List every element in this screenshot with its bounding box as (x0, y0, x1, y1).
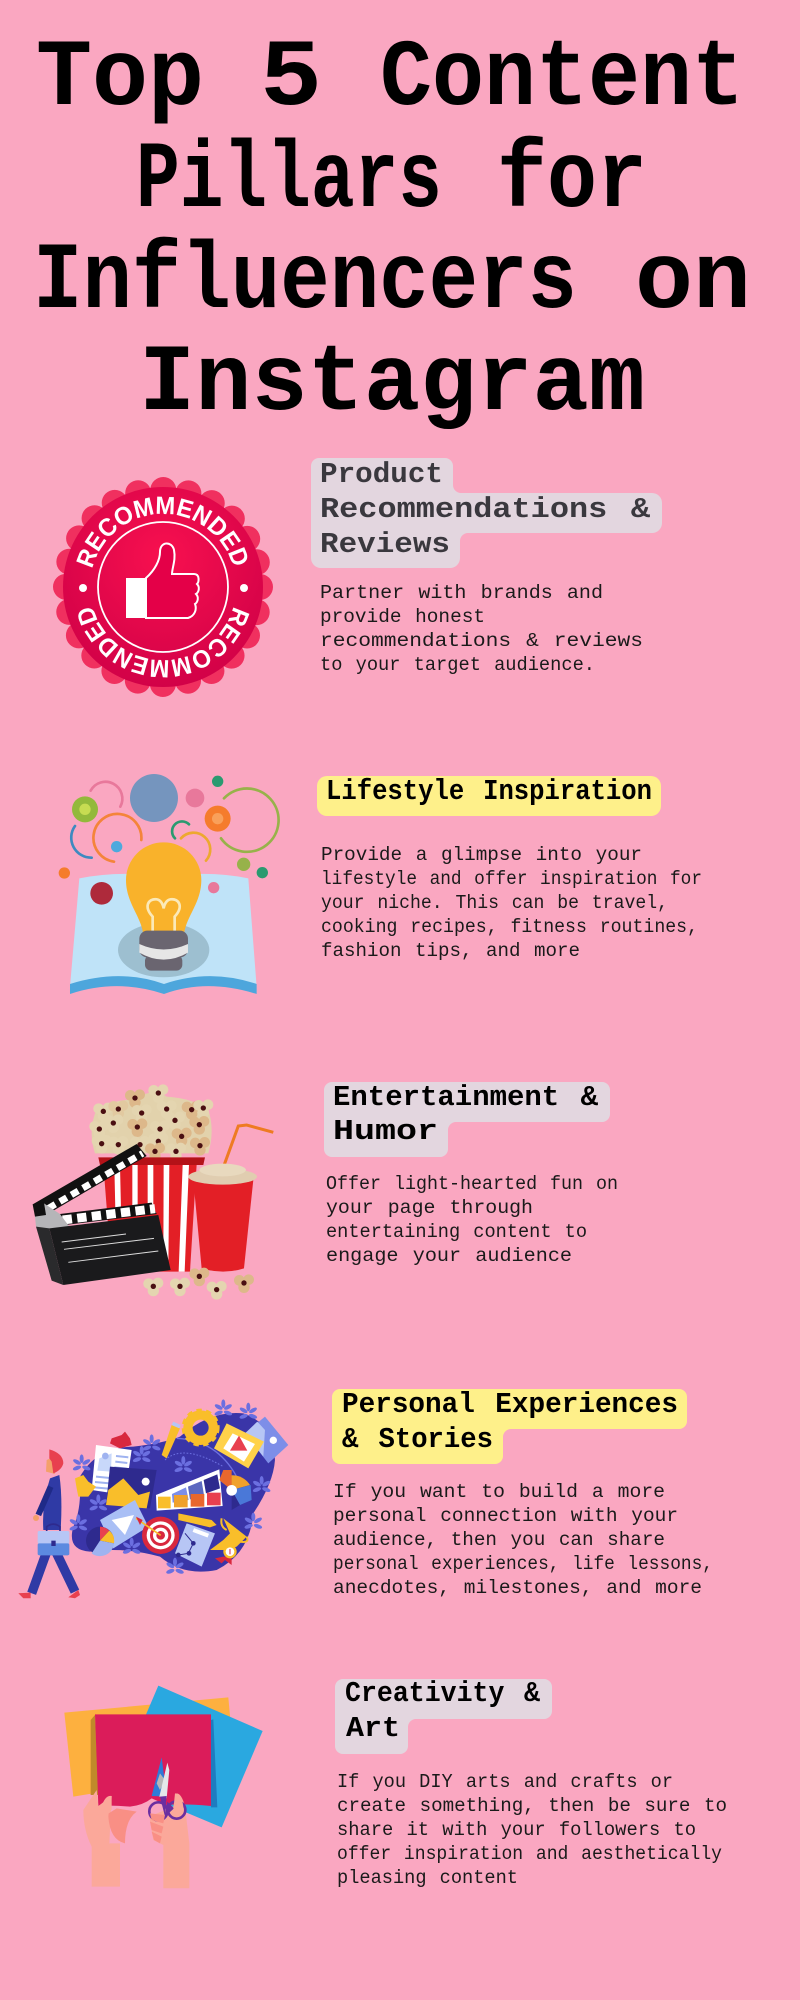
heading: product recommendations: Reviews (320, 528, 450, 561)
heading: personal experiences and stories: & Stories (342, 1423, 493, 1456)
text: creativity body: pleasing content (337, 1867, 518, 1889)
text: entertainment body: entertaining content to (326, 1221, 587, 1243)
heading: entertainment and humor: Entertainment & (333, 1081, 599, 1114)
text: entertainment body: engage your audience (326, 1245, 572, 1267)
icon: recommended badge (53, 477, 273, 697)
text: personal experiences body: audience, then you can share (333, 1529, 665, 1551)
text: lifestyle inspiration body: lifestyle and offer inspiration for (321, 868, 702, 890)
text: personal experiences body (333, 1481, 713, 1599)
title: Top (36, 25, 204, 133)
icon: light bulb and book (59, 774, 279, 994)
text: creativity body: offer inspiration and aesthetically (337, 1843, 722, 1865)
title (33, 25, 751, 438)
icon: recommended badge: RECOMMENDED (76, 496, 248, 568)
text: lifestyle inspiration body (321, 844, 702, 962)
title: Influencers (33, 228, 577, 336)
icon: popcorn, clapperboard and drink (33, 1084, 273, 1300)
icon: recommended badge: RECOMMENDED (78, 608, 250, 678)
icon: person walking with creative objects (18, 1399, 288, 1598)
text: lifestyle inspiration body: fashion tips, and more (321, 940, 580, 962)
text: lifestyle inspiration body: Provide a glimpse into your (321, 844, 642, 866)
text: entertainment body: your page through (326, 1197, 533, 1219)
text: entertainment body (326, 1173, 618, 1267)
text: product recommendations body: recommendations & reviews (320, 630, 643, 652)
text: lifestyle inspiration body: your niche. This can be travel, (321, 892, 668, 914)
text: personal experiences body: personal connection with your (333, 1505, 678, 1527)
text: personal experiences body: personal experiences, life lessons, (333, 1553, 713, 1575)
title: Instagram (139, 330, 645, 438)
text: personal experiences body: anecdotes, milestones, and more (333, 1577, 702, 1599)
heading: product recommendations (311, 458, 662, 568)
text: creativity body: If you DIY arts and crafts or (337, 1771, 673, 1793)
text: product recommendations body: Partner with brands and (320, 582, 603, 604)
text: entertainment body: Offer light-hearted fun on (326, 1173, 618, 1195)
heading: lifestyle inspiration: Lifestyle Inspiration (326, 775, 652, 808)
text: lifestyle inspiration body: cooking recipes, fitness routines, (321, 916, 698, 938)
heading: creativity and art: Art (346, 1712, 400, 1745)
title: on (635, 228, 751, 336)
text: creativity body: share it with your followers to (337, 1819, 696, 1841)
title: Pillars (136, 127, 442, 235)
text: creativity body (337, 1771, 727, 1889)
text: personal experiences body: If you want to build a more (333, 1481, 665, 1503)
heading: product recommendations: Recommendations & (320, 493, 651, 526)
title: 5 (260, 25, 322, 133)
title: for (497, 127, 647, 235)
heading: entertainment and humor: Humor (333, 1115, 438, 1148)
heading: personal experiences and stories (332, 1388, 687, 1464)
icon: hands cutting paper (64, 1686, 263, 1888)
heading: creativity and art: Creativity & (345, 1677, 541, 1710)
heading: creativity and art (335, 1677, 552, 1754)
heading: entertainment and humor (324, 1081, 610, 1157)
text: product recommendations body: to your target audience. (320, 654, 595, 676)
text: creativity body: create something, then be sure to (337, 1795, 727, 1817)
title: Content (380, 25, 744, 133)
text: product recommendations body: provide honest (320, 606, 485, 628)
heading: personal experiences and stories: Personal Experiences (342, 1388, 678, 1421)
text: product recommendations body (320, 582, 643, 676)
heading: product recommendations: Product (320, 458, 443, 491)
